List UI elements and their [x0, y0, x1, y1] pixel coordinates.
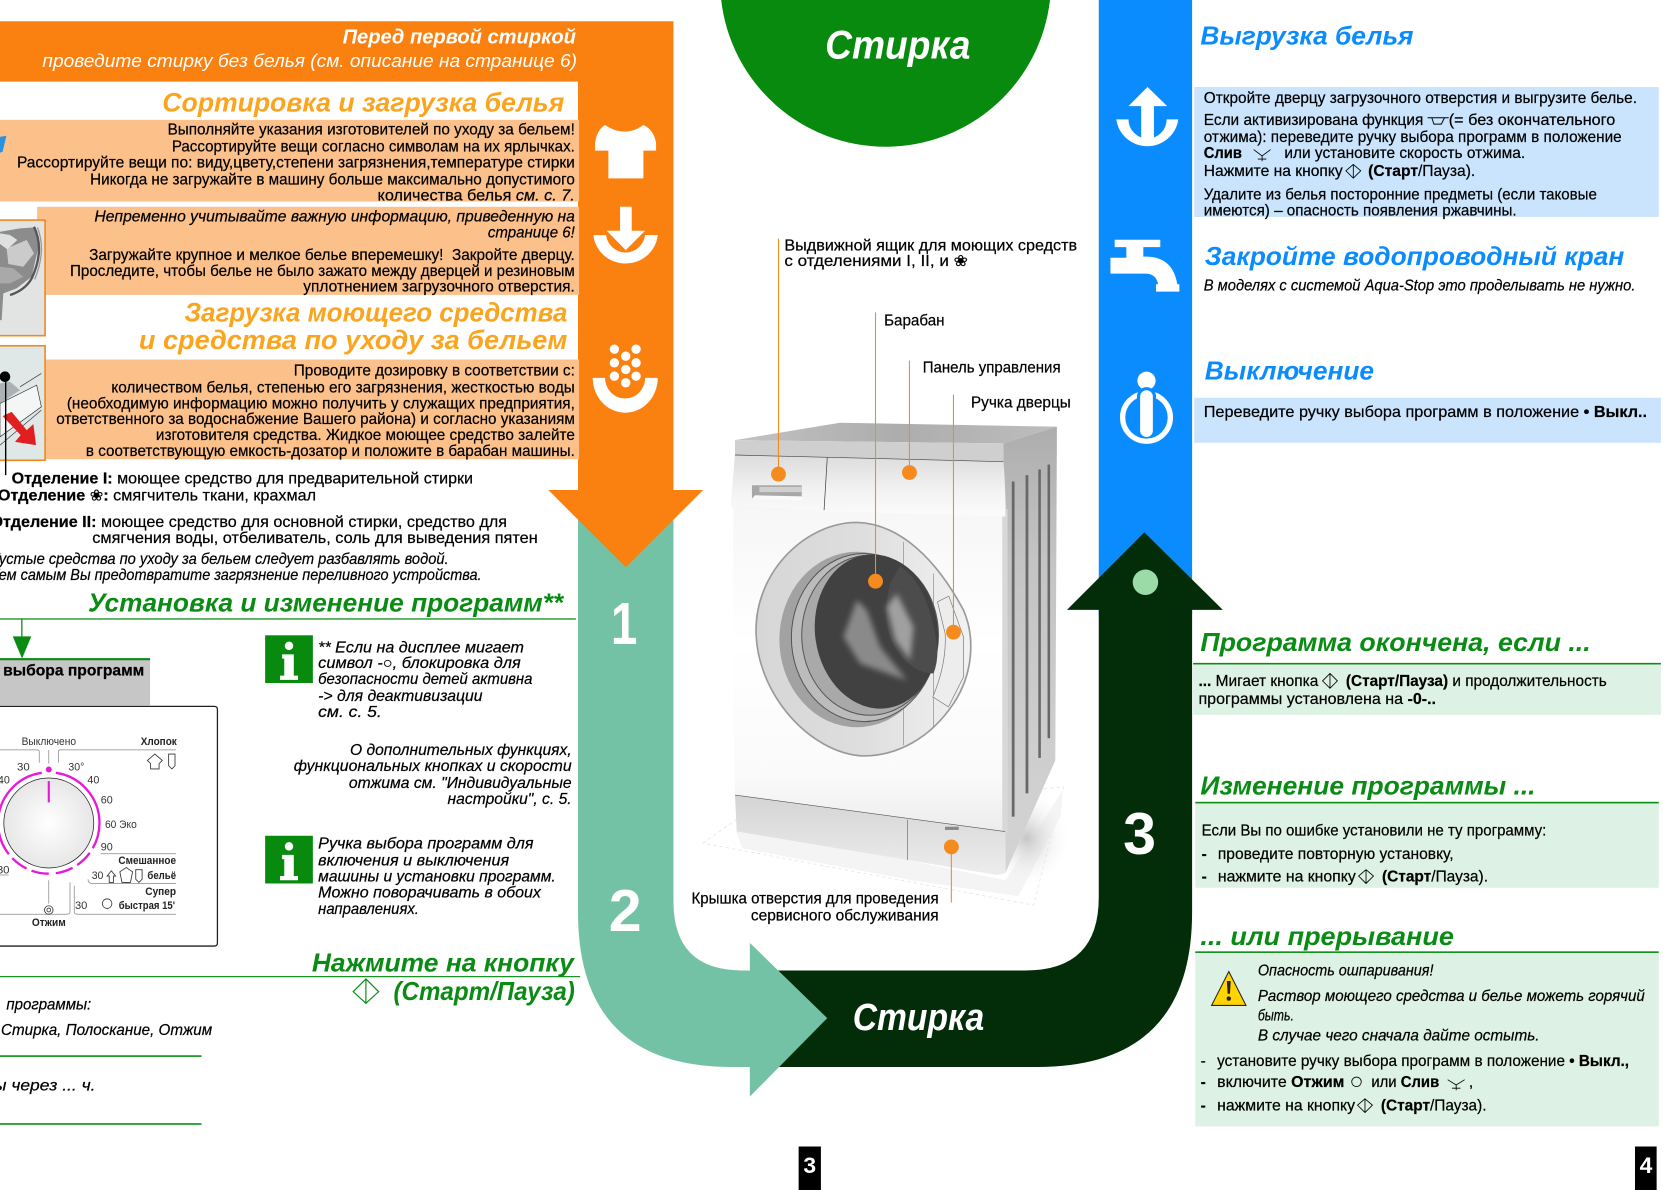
indicator dot [1133, 570, 1158, 595]
callouts: machine parts: Барабан [884, 313, 945, 330]
icon: info [1123, 372, 1170, 441]
note: child lock: см. с. 5. [318, 704, 382, 721]
note: additional functions: отжима см. "Индивидуальные [349, 775, 572, 792]
arrow: teal step 2 [578, 498, 827, 1097]
dial labels: 40 [87, 774, 99, 786]
door [756, 522, 971, 756]
callouts: machine parts [692, 237, 1077, 925]
callouts: machine parts: сервисного обслуживания [751, 908, 939, 925]
dial labels: Смешанное [118, 855, 176, 867]
heading: detergent: Загрузка моющего средства [185, 297, 567, 327]
dial labels: 30 [17, 762, 30, 774]
floor shadow [736, 790, 1063, 896]
callouts: machine parts: Панель управления [923, 359, 1061, 376]
illustration: washing machine [703, 423, 1071, 905]
note: aqua-stop: В моделях с системой Aqua-Stop это проделывать не нужно. [1204, 278, 1635, 295]
arrow: dark green step 3 [742, 532, 1223, 1067]
door handle [933, 596, 963, 707]
step numbers: 1 [611, 590, 637, 657]
arrow: orange step 1 [0, 21, 703, 567]
panel: interruption text: - [1201, 1097, 1206, 1114]
dial labels: Отжим [32, 917, 66, 929]
panel: detergent text: ответственного за водоснабжение Вашего района) и согласно указаниям [56, 411, 575, 428]
panel: loading text: Проследите, чтобы белье не было зажато между дверцей и резиновым [70, 263, 575, 280]
heading: press start [0, 950, 580, 1006]
banner text: Перед первой стиркой [343, 26, 576, 48]
panel: unloading text: Откройте дверцу загрузочного отверстия и выгрузите белье. [1204, 90, 1637, 107]
panel: interruption text: или Слив [1371, 1074, 1439, 1091]
panel: interruption text: В случае чего сначала дайте остыть. [1258, 1027, 1540, 1044]
step numbers: 2 [609, 877, 642, 944]
panel: interruption text: Раствор моющего средства и белье можеть горячий [1258, 988, 1645, 1005]
drum highlights [843, 593, 913, 680]
panel: detergent text: количеством белья, степенью его загрязнения, жесткостью воды [111, 379, 575, 396]
front [731, 455, 1008, 833]
panel: switching off text [1194, 398, 1661, 443]
plinth [735, 795, 1005, 875]
heading: close tap: Закройте водопроводный кран [1205, 243, 1624, 271]
heading: sorting: Сортировка и загрузка белья [162, 87, 565, 117]
step numbers: 3 [1123, 800, 1156, 867]
panel: detergent text: (необходимую информацию можно получить у служащих предприятия, [67, 395, 575, 412]
panel: interruption text: (Старт/Пауза). [1381, 1097, 1487, 1114]
panel: unloading text: или установите скорость отжима. [1284, 145, 1525, 162]
title circle [721, 0, 1050, 147]
panel: interruption text: быть. [1258, 1007, 1294, 1024]
panel: program finished text [1193, 663, 1661, 715]
callouts: machine parts: с отделениями I, II, и ❀ [784, 253, 968, 270]
panel: loading text: странице 6! [488, 225, 576, 242]
panel: change program text: (Старт/Пауза). [1382, 868, 1488, 885]
heading: change program: Изменение программы ... [1200, 772, 1536, 800]
panel: unloading text: (Старт/Пауза). [1368, 163, 1475, 180]
panel: interruption text: нажмите на кнопку [1217, 1097, 1355, 1114]
panel: unloading text: Если активизирована функция [1204, 112, 1423, 129]
floor outline [703, 787, 1064, 905]
heading: switching off: Выключение [1205, 358, 1374, 386]
panel: program finished text: (Старт/Пауза) и продолжительность [1346, 673, 1607, 690]
arrow: to program selector [13, 619, 31, 659]
note: additional functions: настройки", с. 5. [448, 791, 572, 808]
dial labels: 90 [101, 842, 113, 854]
panel: unloading text: отжима): переведите ручку выбора программ в положение [1204, 129, 1622, 146]
dial labels: 30 [75, 900, 87, 912]
program stages text: Стирка, Полоскание, Отжим [1, 1022, 213, 1039]
panel: detergent text: Проводите дозировку в соответствии с: [294, 362, 575, 379]
panel: change program text: нажмите на кнопку [1218, 868, 1356, 885]
panel: change program text [1195, 802, 1659, 888]
arrow: blue step band [1099, 0, 1192, 615]
photo: laundry in drum [0, 220, 45, 336]
note: selector knob: Ручка выбора программ для [318, 835, 533, 852]
note: child lock: -> для деактивизации [318, 688, 483, 705]
panel: detergent text [46, 360, 579, 460]
panel: interruption text: включите Отжим [1217, 1074, 1344, 1091]
panel: sorting text [0, 120, 579, 204]
icon: tap [1110, 240, 1179, 292]
dial labels: 30° [68, 762, 84, 774]
panel: change program text: - [1202, 846, 1207, 863]
panel: sorting text: Выполняйте указания изготовителей по уходу за бельем! [168, 122, 575, 139]
banner text [42, 26, 577, 71]
panel: interruption text: Опасность ошпаривания! [1258, 963, 1434, 980]
icon: warning [1212, 972, 1246, 1005]
panel: unloading text: (= без окончательного [1449, 112, 1615, 129]
compartments text: Отделение II: моющее средство для основной стирки, средство для [0, 514, 507, 531]
panel: interruption text: - [1201, 1053, 1206, 1070]
panel: detergent text: в соответствующую емкость-дозатор и положите в барабан машины. [86, 443, 575, 460]
page number 3: 3 [803, 1153, 816, 1178]
dial knob [4, 778, 94, 868]
dial labels: быстрая 15' [119, 900, 175, 912]
note: additional functions: функциональных кнопках и скорости [294, 758, 572, 775]
dial labels: Супер [145, 886, 177, 898]
icon: unload arrow [1116, 87, 1178, 146]
panel: switching off text: Переведите ручку выбора программ в положение • Выкл.. [1204, 404, 1647, 421]
compartments text: Отделение I: моющее средство для предварительной стирки [12, 471, 473, 488]
panel: interruption text [1195, 951, 1659, 1126]
heading: press start: Нажмите на кнопку [312, 950, 576, 978]
heading: unloading: Выгрузка белья [1200, 23, 1414, 51]
heading: detergent: и средства по уходу за бельем [139, 325, 568, 355]
note: selector knob [318, 835, 556, 918]
note: child lock: символ -○, блокировка для [318, 655, 521, 672]
page number 4 [1635, 1147, 1657, 1190]
panel: loading text [37, 207, 579, 296]
note: selector knob: Можно поворачивать в обоих [318, 884, 542, 901]
icon: info note 2 [265, 836, 313, 883]
panel: sorting text: Никогда не загружайте в машину больше максимально допустимого [90, 172, 575, 189]
compartments text: Отделение ❀: смягчитель ткани, крахмал [0, 488, 316, 505]
icon: detergent [593, 344, 658, 413]
note: selector knob: направлениях. [318, 901, 419, 918]
note: selector knob: машины и установки программ. [318, 868, 556, 885]
note: additional functions: О дополнительных функциях, [350, 742, 572, 759]
side [1003, 427, 1057, 873]
drawer [752, 485, 802, 501]
callout line: drawer dot [0, 371, 10, 475]
compartments text: Тем самым Вы предотвратите загрязнение переливного устройства. [0, 567, 482, 584]
dial pointer [46, 766, 52, 802]
callouts: machine parts: Крышка отверстия для проведения [692, 891, 939, 908]
program stages text: программы: [6, 997, 91, 1014]
program stages text [0, 997, 213, 1125]
step numbers [609, 590, 1156, 944]
photo: detergent drawer [0, 346, 45, 460]
drum [805, 546, 948, 717]
dial symbols [45, 754, 175, 914]
panel: unloading text: Удалите из белья посторонние предметы (если таковые [1204, 186, 1597, 203]
page number 3 [799, 1147, 821, 1190]
icon: load arrow [593, 207, 658, 264]
panel: change program text: проведите повторную установку, [1218, 846, 1454, 863]
panel: unloading text [1194, 87, 1659, 219]
panel: program finished text: программы установлена на -0-.. [1198, 691, 1436, 708]
note: child lock: безопасности детей активна [318, 671, 533, 688]
panel: unloading text: имеются) – опасность появления ржавчины. [1204, 202, 1517, 219]
panel: unloading text: Нажмите на кнопку [1204, 163, 1343, 180]
dial labels: Выключено [22, 736, 76, 748]
banner text: проведите стирку без белья (см. описание на странице 6) [42, 51, 577, 71]
panel: loading text: Загружайте крупное и мелкое белье вперемешку! Закройте дверцу. [89, 247, 575, 264]
dial labels [0, 736, 177, 929]
icon: shirt [595, 125, 656, 178]
dial ring [0, 772, 99, 874]
arrow label: Стирка [853, 996, 984, 1039]
panel: sorting text: Рассортируйте вещи по: виду,цвету,степени загрязнения,температуре стирки [17, 155, 575, 172]
panel: unloading text: Слив [1204, 145, 1242, 162]
panel: sorting text: Рассортируйте вещи согласно символам на их ярлычках. [172, 139, 575, 156]
panel: loading text: Непременно учитывайте важную информацию, приведенную на [94, 209, 575, 226]
top surface [735, 423, 1057, 443]
dial labels: 60 Эко [105, 819, 137, 831]
compartments text: Густые средства по уходу за бельем следует разбавлять водой. [0, 551, 449, 568]
panel: detergent text: изготовителя средства. Жидкое моющее средство залейте [156, 427, 575, 444]
heading: detergent [139, 297, 568, 355]
panel: interruption text: , [1469, 1074, 1473, 1091]
panel: change program text: Если Вы по ошибке установили не ту программу: [1202, 823, 1546, 840]
dial labels: Хлопок [141, 736, 177, 748]
control panel [731, 455, 1005, 517]
compartments text: смягчения воды, отбеливатель, соль для выведения пятен [92, 530, 538, 547]
title circle: Стирка [825, 22, 970, 67]
page number 4: 4 [1640, 1153, 1653, 1178]
note: child lock: ** Если на дисплее мигает [318, 639, 524, 656]
compartments text [0, 471, 538, 584]
panel: change program text: - [1202, 868, 1207, 885]
dial labels: бельё [147, 870, 176, 882]
panel: sorting text: количества белья см. с. 7. [378, 187, 575, 204]
panel: program finished text: ... Мигает кнопка [1198, 673, 1319, 690]
callouts: machine parts: Ручка дверцы [971, 394, 1071, 411]
panel: interruption text: установите ручку выбора программ в положение • Выкл., [1217, 1053, 1629, 1070]
blue fragment [0, 136, 6, 153]
door gasket [779, 552, 934, 727]
note: additional functions [294, 742, 572, 808]
note: selector knob: включения и выключения [318, 852, 509, 869]
panel: program dial [0, 706, 217, 946]
heading: press start: (Старт/Пауза) [393, 978, 575, 1006]
heading: program finished: Программа окончена, если ... [1200, 629, 1591, 657]
heading: or interruption: ... или прерывание [1200, 923, 1454, 951]
icon: info note 1 [265, 635, 313, 683]
callouts: machine parts: Выдвижной ящик для моющих средств [784, 237, 1077, 254]
panel: loading text: уплотнением загрузочного отверстия. [303, 279, 575, 296]
dial labels: 30 [92, 870, 104, 882]
panel: interruption text: - [1201, 1074, 1206, 1091]
heading: program setting: Установка и изменение программ** [88, 589, 564, 617]
label: program selector [0, 658, 150, 705]
label: program selector: выбора программ [3, 663, 144, 680]
note: child lock [318, 639, 533, 721]
dial labels: 60 [101, 795, 113, 807]
